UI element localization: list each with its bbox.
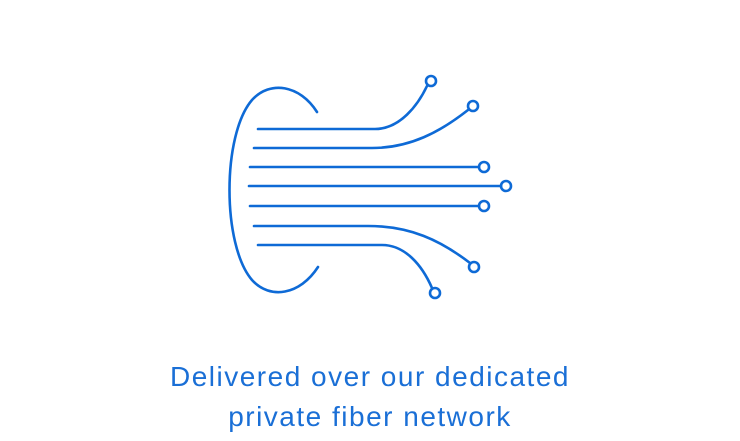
caption: Delivered over our dedicated (170, 361, 570, 392)
caption: private fiber network (228, 401, 512, 432)
caption (170, 361, 570, 432)
